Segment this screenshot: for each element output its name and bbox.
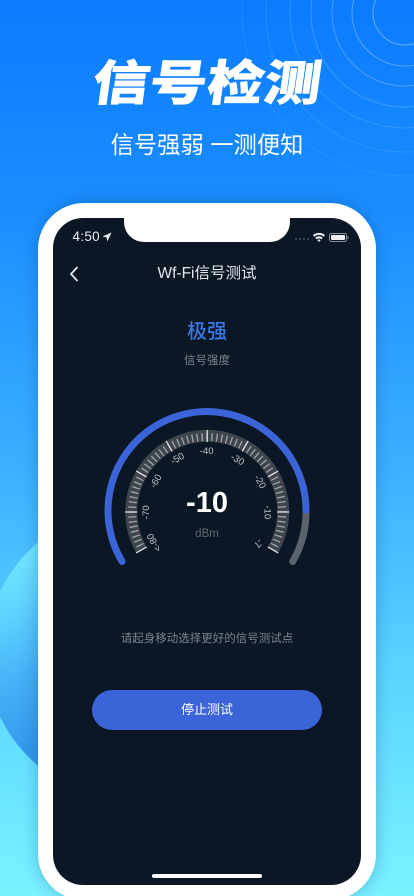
- button: stop test: 停止测试: [181, 702, 233, 717]
- decorative signal rings: [242, 0, 414, 176]
- signal label: 信号强度: [184, 355, 230, 367]
- gauge scale labels: [141, 446, 272, 553]
- button: stop test: [92, 690, 322, 730]
- status icons: [295, 232, 348, 242]
- gauge major ticks: [125, 430, 289, 553]
- gauge scale labels: -50: [169, 451, 186, 467]
- gauge minor ticks: [132, 437, 282, 550]
- gauge scale labels: -10: [261, 505, 272, 519]
- gauge: [104, 408, 310, 565]
- gauge scale band: [131, 436, 283, 550]
- gauge scale labels: <-80: [145, 531, 164, 553]
- gauge scale labels: -20: [251, 473, 268, 491]
- icon: location arrow: [102, 232, 112, 242]
- phone frame: [38, 203, 376, 896]
- home indicator: [152, 874, 262, 878]
- icon: back chevron: [70, 266, 78, 282]
- decorative circle: lower left: [0, 508, 278, 800]
- subtitle: 信号强弱 一测便知: [111, 132, 303, 158]
- gauge scale labels: -30: [229, 452, 246, 468]
- gauge unit: dBm: [195, 528, 219, 540]
- notch: [124, 215, 290, 242]
- gauge scale labels: -60: [148, 473, 165, 490]
- gauge value: -10: [186, 487, 228, 519]
- gauge outer track: [108, 412, 306, 562]
- phone screen: [53, 218, 361, 885]
- status time: 4:50: [72, 229, 100, 244]
- gauge scale labels: -70: [141, 505, 152, 519]
- signal level: 极强: [187, 321, 227, 343]
- gauge scale labels: -40: [200, 446, 214, 457]
- nav title: Wf-Fi信号测试: [157, 265, 256, 282]
- hint text: 请起身移动选择更好的信号测试点: [121, 633, 293, 645]
- title: 信号检测: [89, 58, 325, 111]
- gauge scale labels: -7: [251, 536, 265, 549]
